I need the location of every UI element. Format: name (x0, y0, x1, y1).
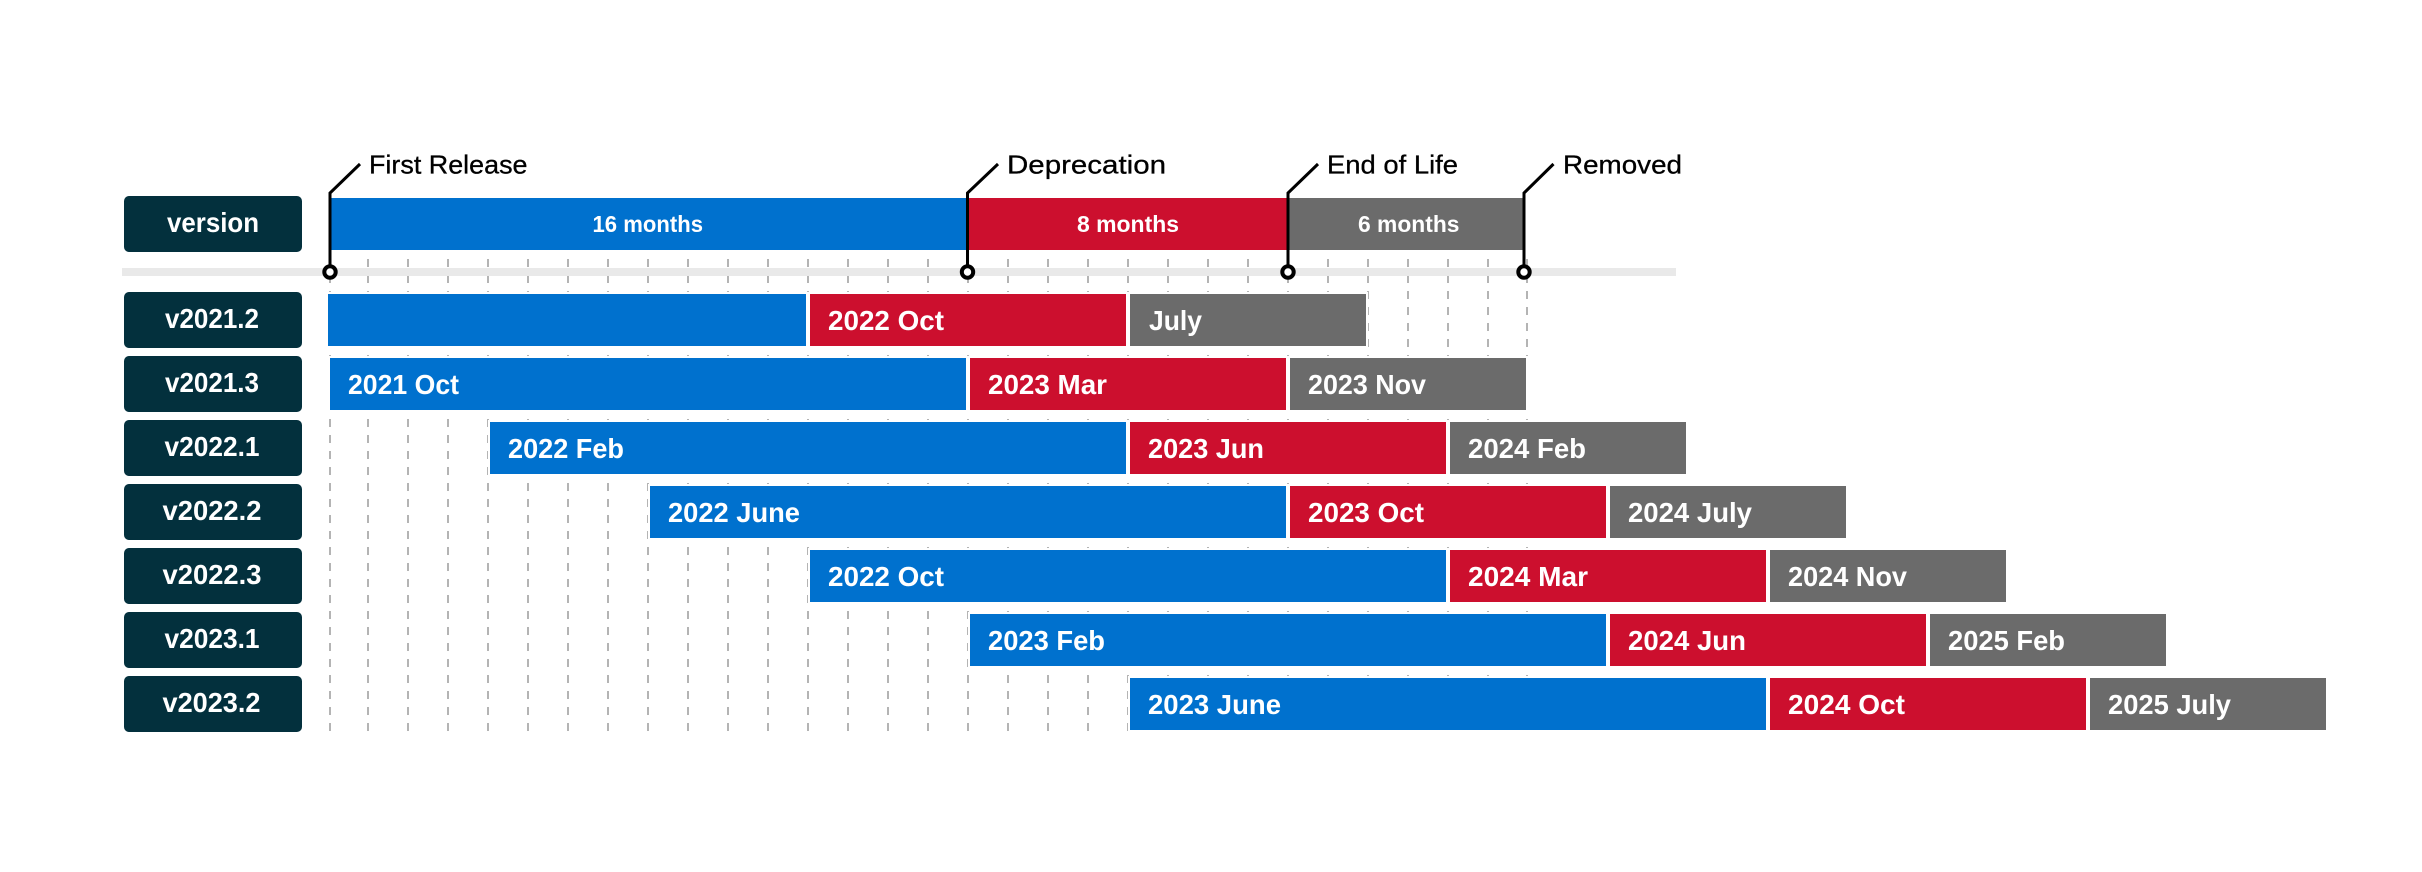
marker: Removed (1518, 150, 1682, 278)
marker: End of Life: End of Life (1327, 150, 1458, 180)
row: v2021.2: v2021.2 (165, 303, 259, 334)
row: v2021.3 (124, 356, 1526, 412)
marker: End of Life (1282, 150, 1458, 278)
row: v2021.2: July (1149, 305, 1203, 336)
row: v2023.1 (124, 612, 2166, 668)
row: v2022.3: 2022 Oct (828, 561, 944, 592)
version header label: version (167, 207, 259, 238)
row: v2023.2: v2023.2 (162, 687, 260, 718)
row: v2022.2: v2022.2 (162, 495, 262, 526)
row: v2022.1: v2022.1 (164, 431, 260, 462)
6 months bar: 6 months (1358, 211, 1460, 237)
row: v2022.2 (124, 484, 1846, 540)
marker: Deprecation (962, 150, 1166, 278)
row: v2023.2 (124, 676, 2326, 732)
row: v2022.2: 2024 July (1628, 497, 1753, 528)
row: v2021.3: 2021 Oct (348, 369, 459, 400)
marker: Deprecation: Deprecation (1007, 150, 1166, 180)
16 months bar (330, 198, 968, 250)
row: v2022.1: 2022 Feb (508, 433, 624, 464)
dashed month grid (330, 259, 1527, 732)
row: v2022.2: 2023 Oct (1308, 497, 1424, 528)
row: v2023.2: 2024 Oct (1788, 689, 1905, 720)
row: v2023.1: 2024 Jun (1628, 625, 1746, 656)
row: v2022.3: 2024 Mar (1468, 561, 1588, 592)
row: v2022.1: 2023 Jun (1148, 433, 1264, 464)
version header label (124, 196, 302, 252)
marker: First Release (324, 150, 528, 278)
marker: Removed: Removed (1563, 150, 1682, 180)
row: v2022.1: 2024 Feb (1468, 433, 1586, 464)
row: v2023.2: 2023 June (1148, 689, 1281, 720)
row: v2022.3 (124, 548, 2006, 604)
row: v2022.1 (124, 420, 1686, 476)
row: v2021.3: 2023 Mar (988, 369, 1107, 400)
row: v2021.2 (124, 292, 1366, 348)
row: v2021.2: 2022 Oct (828, 305, 944, 336)
row: v2021.3: 2023 Nov (1308, 369, 1427, 400)
row: v2023.1: 2025 Feb (1948, 625, 2065, 656)
6 months bar (1288, 198, 1524, 250)
row: v2023.2: 2025 July (2108, 689, 2232, 720)
marker: First Release: First Release (369, 150, 528, 180)
legend row: lifecycle durations (124, 196, 1524, 252)
axis line (122, 268, 1676, 276)
8 months bar: 8 months (1077, 211, 1179, 237)
row: v2023.1: v2023.1 (164, 623, 260, 654)
16 months bar: 16 months (592, 211, 703, 237)
row: v2022.3: v2022.3 (162, 559, 262, 590)
row: v2021.3: v2021.3 (165, 367, 259, 398)
row: v2022.3: 2024 Nov (1788, 561, 1908, 592)
row: v2022.2: 2022 June (668, 497, 800, 528)
row: v2023.1: 2023 Feb (988, 625, 1105, 656)
8 months bar (968, 198, 1288, 250)
